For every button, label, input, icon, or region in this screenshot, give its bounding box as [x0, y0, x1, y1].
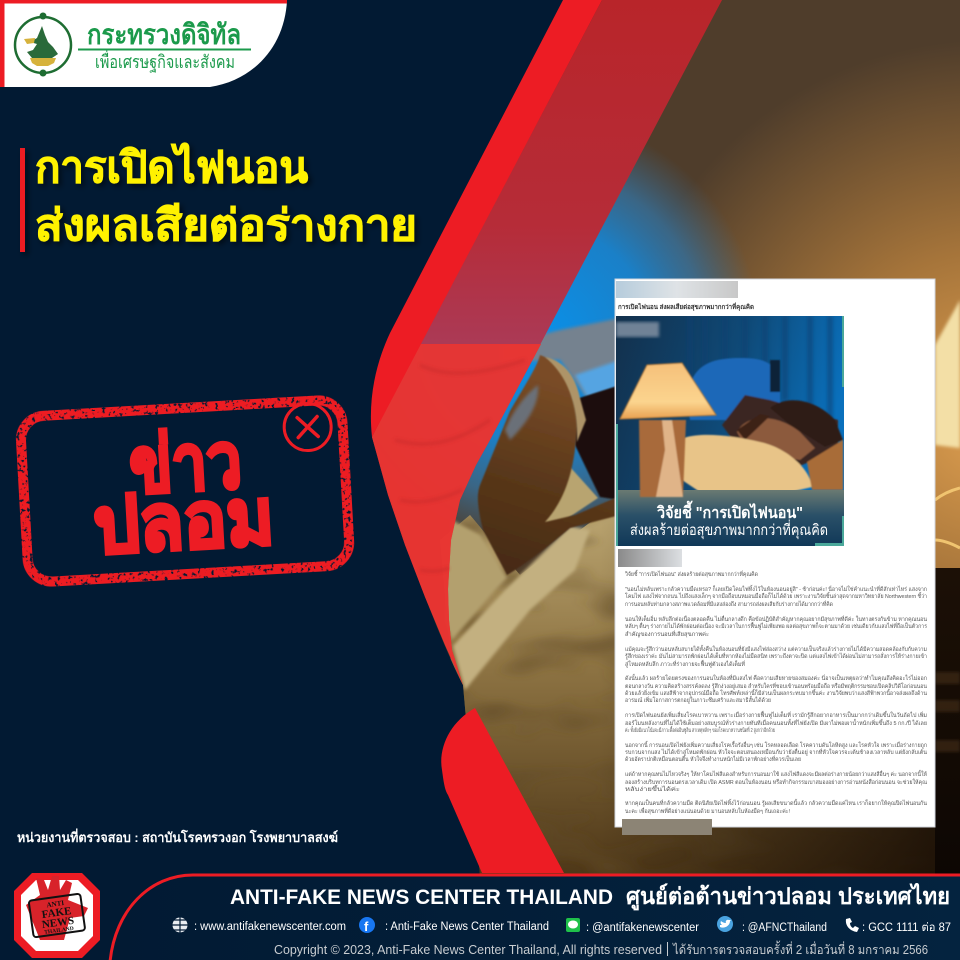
- ministry name: กระทรวงดิจิทัล: [87, 19, 241, 50]
- icon: globe: [172, 918, 188, 932]
- article body text: หากคุณเป็นคนที่กลัวความมืด ติดนิสัยเปิดไฟทิ้งไว้ก่อนนอน รู้ผลเสียขนาดนี้แล้ว กลัวความมืดแค่ไหน เราก็อยากให้คุณปิดไฟนอนกัน: [625, 798, 927, 807]
- anti-fake news badge: FAKE: [41, 905, 72, 921]
- solid red band: [371, 0, 602, 437]
- verification date: ได้รับการตรวจสอบครั้งที่ 2 เมื่อวันที่ 8 มกราคม 2566: [672, 940, 928, 957]
- icon: facebook: f: [364, 919, 369, 934]
- footer panel: ศูนย์ต่อต้านข่าวปลอม ประเทศไทย: [626, 882, 950, 911]
- article body text: การเปิดไฟนอนยังเพิ่มเสี่ยงโรคเบาหวาน เพราะเมื่อร่างกายฟื้นฟูไม่เต็มที่ เรามักรู้สึกอยากอาหารเป็นมากกว่าเดิมขึ้นในวันถัดไป เพิ่ม: [625, 710, 927, 719]
- anti-fake news badge: ANTI: [46, 899, 65, 909]
- website: : www.antifakenewscenter.com: [194, 921, 346, 933]
- icon: phone: [846, 918, 859, 932]
- footer headline: ANTI-FAKE NEWS CENTER THAILAND: [230, 886, 613, 909]
- icon: line: [566, 918, 580, 932]
- article body text: แม้คุณจะรู้สึกว่านอนหลับสบายได้ทั้งคืนในห้องนอนที่ยังมีแสงไฟส่องสว่าง แต่ความเป็นจริงแล้วร่างกายไม่ได้มีความสอดคล้องกับกับความ: [625, 644, 927, 653]
- stamp: fake news: [20, 399, 350, 583]
- article body text: นะคะ เพื่อสุขภาพที่ดีอย่างแน่นอนด้วย มานอนหลับในห้องมืดๆ กันเถอะค่ะ!: [625, 807, 790, 815]
- phone number: : GCC 1111 ต่อ 87: [862, 922, 951, 934]
- article body text: ดังนั้นแล้ว ผลร้ายโดยตรงของการนอนในห้องที่มีแสงไฟ คือความเสียหายของสมองค่ะ นี่อาจเป็นเหตุผลว่าทำไมคุณถึงคิดอะไรไม่ออก: [625, 673, 927, 682]
- bottom red shape: [441, 708, 564, 873]
- blurred profile strip: [616, 281, 738, 298]
- title block: ส่งผลเสียต่อร่างกาย: [35, 202, 417, 250]
- twitter account: : @AFNCThailand: [742, 922, 827, 934]
- article body text: โคมไฟ แสงไฟจากถนน ไปถึงแสงเล็กๆ จากมือถือบนหมอนมือถือก็ไม่ได้ด้วย เพราะงานวิจัยชิ้นล่าสุดจากมหาวิทยาลัย Northwestern ชี้ว่า: [625, 591, 927, 600]
- article body text: อารมณ์ เพิ่มโอกาสการตกอยู่ในภาวะซึมเศร้าและสมาธิสั้นได้ด้วย: [625, 695, 771, 704]
- photo: woman sleeping with the lamp on: [372, 0, 960, 874]
- article body text: หลับง่ายขึ้นได้ค่ะ: [625, 784, 680, 793]
- translucent red band: [372, 0, 722, 685]
- footer panel: [110, 875, 960, 960]
- article body text: ด้วยแล้วยิ่งเข้ม แสงสีฟ้าจากอุปกรณ์มือถือ โทรศัพท์เหล่านี้ก็มีส่วนเป็นผลกระทบมากขึ้นค่ะ งานวิจัยพบว่าแสงสีฟ้าพวกนี้อาจส่งผลถึงด้าน: [625, 688, 927, 697]
- copyright: Copyright © 2023, Anti-Fake News Center Thailand, All rights reserved: [274, 943, 662, 957]
- anti-fake news badge: [14, 873, 100, 958]
- article body text: แต่ถ้าหากคุณทนไม่ไหวจริงๆ ให้หาโคมไฟสีแดงสำหรับการนอนมาใช้ แสงไฟสีแดงจะมีผลต่อร่างกายน้อยกว่าแสงสีอื่นๆ ค่ะ นอกจากนี้ให้: [625, 769, 927, 778]
- article body text: รบกวนจากแสง ไม่ได้เข้าสู่โหมดพักผ่อน หัวใจจะตอบสนองเหมือนกับว่ายังตื่นอยู่ จากที่หัวใจควรจะเต้นช้าลงเวลาหลับ แต่ยังกลับเต้น: [625, 748, 927, 756]
- icon: facebook: [359, 917, 375, 934]
- bedside lamp and table: [935, 300, 960, 888]
- facebook name: : Anti-Fake News Center Thailand: [385, 921, 549, 933]
- title block: [20, 142, 417, 252]
- article body text: สำคัญของการนอนที่เสียสุขภาพค่ะ: [625, 630, 709, 638]
- ministry tagline: เพื่อเศรษฐกิจและสังคม: [95, 49, 235, 73]
- anti-fake news badge: THAILAND: [44, 926, 74, 936]
- article body text: [624, 569, 928, 815]
- article body text: วิจัยชี้ "การเปิดไฟนอน" ส่งผลร้ายต่อสุขภาพมากกว่าที่คุณคิด: [624, 569, 758, 578]
- article body text: สู่โหมดหลับลึก ภาวะที่ร่างกายจะฟื้นฟูตัวเองได้เต็มที่: [625, 659, 745, 668]
- article body text: ตอนกลางวัน ความคิดสร้างสรรค์ลดลง รู้สึกง่วงอยู่เสมอ สำหรับใครที่ชอบเข้านอนพร้อมมือถือ หรือมีพฤติกรรมชอบเปิดคลิปวิดีโอก่อนนอน: [625, 682, 927, 690]
- source agency text: หน่วยงานที่ตรวจสอบ : สถาบันโรคทรวงอก โรงพยาบาลสงฆ์: [17, 828, 338, 845]
- article body text: รู้สึกของเราค่ะ มันไม่สามารถพักผ่อนได้เต็มที่หากห้องไม่มืดสนิท เพราะถึงตาจะปิด แต่แสงไฟเข้าได้ผ่อนไม่สามารถสั่งการให้ร่างกายเข้า: [625, 651, 927, 660]
- card headline: การเปิดไฟนอน ส่งผลเสียต่อสุขภาพมากกว่าที่คุณคิด: [618, 301, 754, 311]
- article image: lamp beside sleeping couple: [616, 316, 844, 546]
- article body text: ด้วยอัตราปกติเหมือนตอนตื่น หัวใจจึงทำงานหนักไม่มีเวลาพักอย่างที่ควรเป็นเลย: [625, 754, 801, 763]
- stamp: fake news: ปลอม: [91, 472, 276, 570]
- stamp cross icon: [283, 402, 332, 452]
- article body text: นอกจากนี้ การนอนเปิดไฟยังเพิ่มความเสี่ยงโรคเรื้อรังอื่นๆ เช่น โรคหลอดเลือด โรคความดันโลหิตสูง และโรคหัวใจ เพราะเมื่อร่างกายถูก: [625, 740, 927, 749]
- article body text: หลับๆ ตื่นๆ ร่างกายไม่ได้พักผ่อนต่อเนื่อง จะมีเวลาในการฟื้นฟูไม่เพียงพอ ผลต่อสุขภาพก็จะตามมาด้วย เช่นเดียวกับแสงไฟที่ถือเป็นตัวการ: [625, 621, 927, 630]
- icon: twitter: [717, 916, 733, 932]
- emblem: ministry seal: [15, 12, 71, 76]
- stamp text: ข่าว: [127, 416, 244, 510]
- article body text: ลองสร้างบริบทการนอนตรงเวลาเดิม เปิด ASMR ตอนในห้องนอน หรือทำกิจกรรมเบาสมองอย่างการอ่านหนังสือก่อนนอน จะช่วยให้คุณ: [625, 778, 928, 786]
- line account: : @antifakenewscenter: [586, 922, 699, 934]
- article body text: ค่ะ ทั้งยังมีแนวโน้มจะมีภาวะดื้อต่ออินซูลิน สาเหตุหลักๆ ของโรคเบาหวานชนิดที่ 2 สูงกว่าอีกด้วย: [625, 725, 775, 734]
- title block: การเปิดไฟนอน: [35, 142, 309, 192]
- blurred author strip: [618, 549, 682, 567]
- article body text: ฮอร์โมนหลังงานที่ไม่ได้ใช้เต็มอย่างสมบูรณ์ทั่วร่างกายทันทีเมื่อคนนอนทั้งที่ไฟยังเปิด มีเผาไม่พอเผาน้ำหนักเพิ่มขึ้นถึง 5 กก./ปี ได้เลย: [625, 718, 927, 727]
- screenshot card: [615, 279, 935, 835]
- article image: lamp beside sleeping couple: ส่งผลร้ายต่อสุขภาพมากกว่าที่คุณคิด: [630, 519, 828, 540]
- article body text: การนอนหลับท่ามกลางสภาพแวดล้อมที่มีแสงส่องถึง สามารถส่งผลเสียกับร่างกายได้มากกว่าที่คิด: [625, 600, 833, 608]
- article image caption: วิจัยชี้ "การเปิดไฟนอน": [656, 500, 803, 522]
- article body text: "นอนไม่หลับเพราะกลัวความมืดเหรอ? ก็เลยเปิดโคมไฟทิ้งไว้ในห้องนอนอยู่สิ" - ช้าก่อนค่ะ! นี่อาจไม่ใช่คำแนะนำที่ดีสักเท่าไหร่ แสงจาก: [625, 584, 927, 593]
- article body text: นอนให้เต็มอิ่ม หลับลึกต่อเนื่องตลอดคืน ไม่ตื่นกลางดึก คือข้อปฏิบัติสำคัญหากคุณอยากมีสุขภาพที่ดีค่ะ ในทางตรงกันข้าม หากคุณนอน: [625, 614, 927, 623]
- logo panel: [0, 0, 287, 87]
- blurred footer strip: [622, 819, 712, 835]
- anti-fake news badge: NEWS: [41, 915, 75, 931]
